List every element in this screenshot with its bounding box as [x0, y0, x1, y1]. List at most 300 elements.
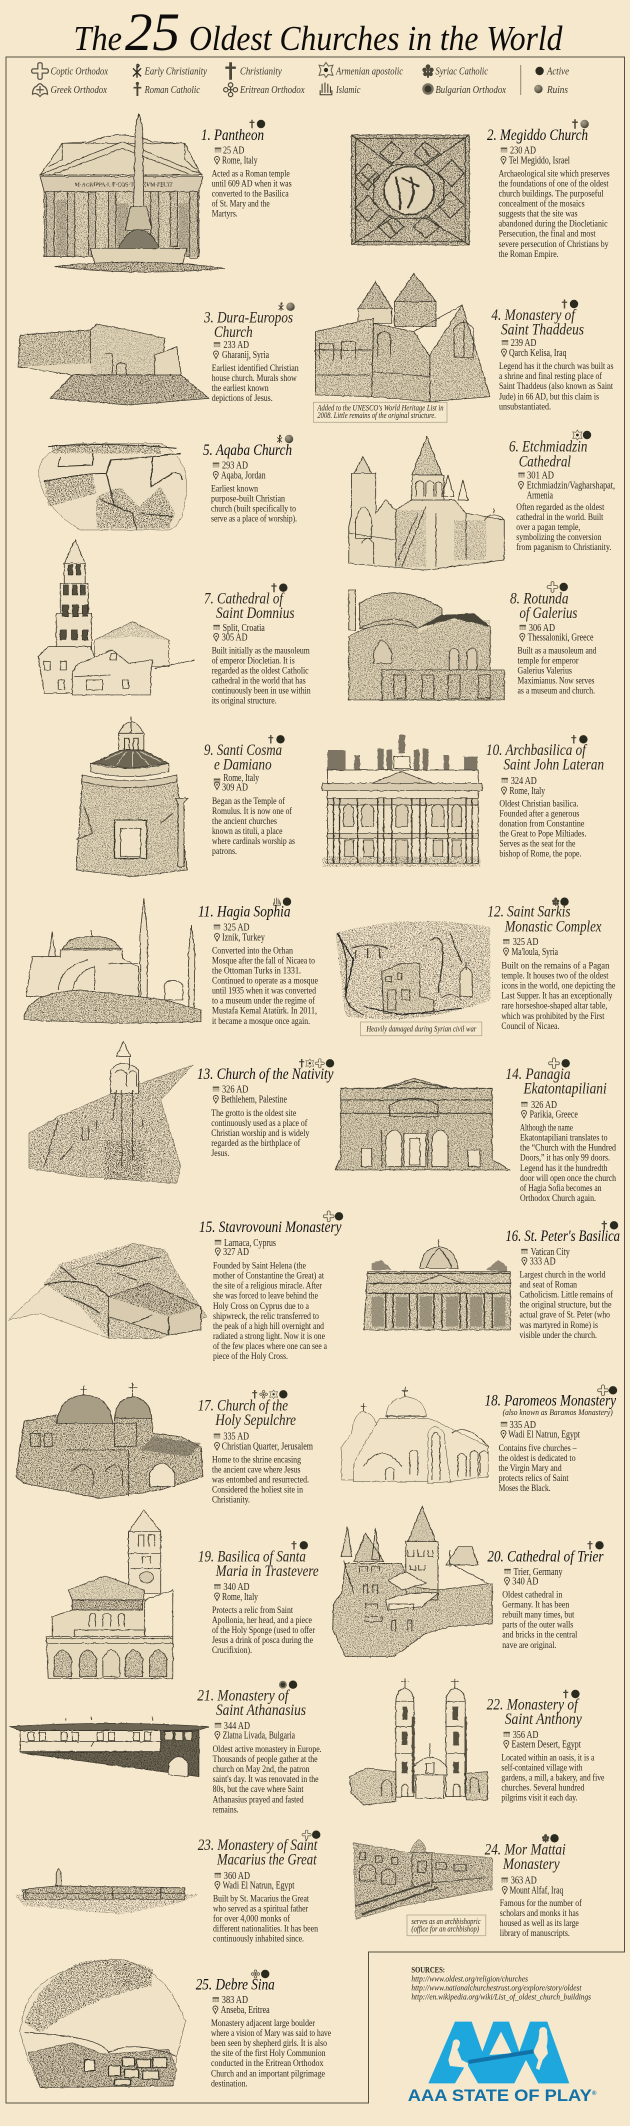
heading: Church [214, 324, 253, 341]
title [74, 2, 563, 62]
status icons [279, 302, 295, 311]
description: regarded as the oldest Catholic [212, 666, 309, 676]
date and location: Christian Quarter, Jerusalem [222, 1442, 313, 1452]
description: abandoned during the Diocletianic [499, 219, 608, 230]
illustration: Mor Mattai Monastery [354, 1839, 492, 1919]
heading: Monastic Complex [504, 918, 602, 935]
description: Built on the remains of a Pagan [501, 960, 610, 972]
heading: 4. Monastery of [491, 307, 577, 324]
date and location [215, 1871, 295, 1892]
date and location: Eastern Desert, Egypt [512, 1740, 581, 1750]
illustration: Aqaba ruins [38, 443, 187, 530]
description: Jude) in 66 AD, but this claim is [499, 391, 599, 402]
location and date: 340 AD [512, 1576, 538, 1588]
description: Contains five churches – [499, 1443, 577, 1454]
title: 25 [125, 2, 180, 62]
description: Germany. It has been [502, 1600, 569, 1610]
description: was martyred in Rome) is [520, 1320, 598, 1331]
date and location: 335 AD [223, 1432, 249, 1442]
caption: war damage note: Heavily damaged during Syrian civil war [366, 1024, 477, 1034]
description: Monastery adjacent large boulder [211, 2018, 316, 2029]
date and location [518, 470, 615, 502]
heading: Saint Athanasius [216, 1702, 306, 1719]
description [499, 798, 586, 860]
description: she was forced to leave behind the [213, 1291, 318, 1302]
heading [485, 1841, 566, 1873]
item 22: Monastery of Saint Anthony [350, 1678, 604, 1805]
location and date [213, 623, 265, 644]
date and location [504, 1730, 581, 1750]
legend: Greek Orthodox [51, 85, 107, 96]
location and date: Larnaca, Cyprus [224, 1238, 276, 1249]
description: Often regarded as the oldest [516, 502, 605, 513]
heading: e Damiano [214, 757, 272, 774]
description: conducted in the Eritrean Orthodox [211, 2058, 324, 2069]
description: Acted as a Roman temple [212, 168, 290, 180]
description [212, 796, 295, 857]
date and location: 363 AD [511, 1876, 537, 1886]
location and date [215, 1238, 276, 1258]
description: of Hagia Sofia becomes an [520, 1183, 602, 1194]
description: Although the name [520, 1122, 573, 1134]
description: until 1935 when it was converted [212, 986, 316, 997]
date and location: 325 AD [223, 922, 250, 934]
item 19: Basilica of Santa Maria in Trastevere [46, 1510, 319, 1678]
heading [486, 742, 604, 774]
description: Founded after a generous [499, 808, 580, 820]
status icons [323, 1211, 343, 1222]
description: Legend has it the hundredth [520, 1163, 608, 1174]
date and location: 340 AD [223, 1582, 250, 1593]
logo: AAA State of Play [408, 2022, 597, 2105]
description: Earliest known [211, 484, 258, 494]
description: Jesus. [211, 1148, 229, 1159]
item 8: Rotunda of Galerius [349, 582, 597, 700]
description: church (built specifically to [211, 504, 296, 514]
date and location: 360 AD [224, 1871, 250, 1882]
heading: 21. Monastery of [197, 1687, 291, 1704]
heading: 3. Dura-Europos [203, 309, 293, 326]
description: the site of the first Holy Communion [211, 2048, 326, 2059]
description: house church. Murals show [212, 373, 297, 384]
date and location: 293 AD [222, 460, 248, 472]
location and date: Split, Croatia [223, 623, 265, 634]
description: from paganism to Christianity. [516, 542, 611, 553]
date and location [503, 937, 558, 958]
description: a shrine and final resting place of [499, 371, 603, 382]
description: of St. Mary and the [212, 199, 270, 210]
description [499, 168, 610, 260]
description: Built initially as the mausoleum [212, 646, 310, 656]
heading: Saint Anthony [505, 1711, 583, 1728]
date and location: 326 AD [531, 1100, 557, 1111]
description: rare horseshoe-shaped altar table, [501, 1001, 607, 1012]
date and location: 344 AD [224, 1721, 250, 1732]
description: the earliest known [212, 383, 269, 394]
description: serve as a place of worship). [211, 514, 297, 524]
illustration: Pantheon [39, 113, 225, 272]
date and location [213, 1084, 287, 1106]
description: to a museum under the regime of [212, 996, 316, 1007]
date and location [502, 338, 566, 359]
description [516, 502, 611, 553]
item 5: Aqaba Church [38, 435, 297, 530]
item 11: Hagia Sophia [24, 898, 318, 1027]
description: who served as a spiritual father [213, 1904, 309, 1914]
date and location: 356 AD [513, 1730, 538, 1741]
description: the peak of a high hill overnight and [213, 1321, 324, 1332]
heading [198, 1548, 319, 1580]
description: Persecution, the final and most [499, 229, 596, 240]
item 16: St. Peter's Basilica [364, 1221, 620, 1341]
status icons [547, 582, 568, 592]
legend [32, 62, 569, 97]
illustration: Paromeos Monastery [342, 1387, 488, 1483]
location and date: Vatican City [531, 1247, 570, 1258]
description: self-contained village with [501, 1762, 583, 1774]
description [213, 1894, 318, 1945]
status icons [571, 735, 588, 744]
heading: 1. Pantheon [201, 127, 264, 144]
description: visible under the church. [520, 1330, 597, 1341]
date and location [521, 1100, 578, 1120]
description: The grotto is the oldest site [211, 1108, 296, 1119]
status icons [291, 1541, 308, 1550]
description: Began as the Temple of [212, 796, 286, 807]
heading: Maria in Trastevere [215, 1563, 319, 1580]
illustration: Church of the Holy Sepulchre [16, 1383, 203, 1498]
heading: 12. Saint Sarkis [487, 904, 570, 921]
illustration: Dura-Europos ruins [18, 324, 209, 405]
legend: Christianity [240, 66, 282, 78]
description: patrons. [212, 846, 237, 857]
description: donation from Constantine [499, 818, 584, 830]
description [502, 1590, 578, 1651]
legend: Syriac Catholic [436, 66, 488, 78]
description: severe persecution of Christians by [499, 239, 609, 250]
description: Council of Nicaea. [501, 1021, 559, 1032]
description: unsubstantiated. [499, 401, 551, 412]
illustration: St. Peter's Basilica [364, 1239, 510, 1330]
description: Holy Cross on Cyprus due to a [213, 1301, 310, 1312]
description: concealment of the mosaics [499, 199, 585, 210]
heading: 10. Archbasilica of [486, 742, 588, 759]
item 21: Monastery of Saint Athanasius [10, 1680, 322, 1815]
title: The [74, 19, 122, 58]
date and location: 326 AD [222, 1084, 248, 1096]
description: library of manuscripts. [500, 1928, 570, 1939]
description: regarded as the birthplace of [211, 1138, 301, 1149]
description: 80s, but the cave where Saint [213, 1784, 304, 1795]
heading: 17. Church of the [198, 1397, 288, 1414]
status icons [587, 1541, 604, 1550]
heading: 22. Monastery of [487, 1696, 580, 1713]
legend: Coptic Orthodox [51, 66, 108, 78]
description: piece of the Holy Cross. [213, 1351, 288, 1362]
description: and seat of Roman [520, 1280, 577, 1290]
item 10: Archbasilica of Saint John Lateran [322, 735, 604, 867]
item 14: Panagia Ekatontapiliani [336, 1058, 616, 1204]
date and location: 383 AD [222, 1995, 248, 2006]
heading: Saint John Lateran [504, 757, 604, 774]
date and location: 325 AD [513, 937, 538, 948]
status icons [273, 898, 291, 906]
description: symbolizing the conversion [516, 532, 601, 543]
date and location: Zlatna Livada, Bulgaria [223, 1730, 295, 1742]
location and date: 305 AD [222, 632, 248, 644]
date and location [214, 146, 258, 166]
date and location: Rome, Italy [510, 786, 545, 797]
description [212, 363, 299, 404]
description: it became a mosque once again. [212, 1016, 310, 1027]
date and location [501, 1420, 580, 1440]
status icons [573, 430, 591, 440]
item 18: Paromeos Monastery [342, 1385, 617, 1494]
date and location [502, 776, 545, 797]
illustration: Hagia Sophia [24, 898, 201, 1023]
description: Christianity. [212, 1495, 250, 1506]
date and location [213, 1995, 270, 2016]
description: continuously used as a place of [211, 1118, 308, 1129]
heading: Macarius the Great [216, 1852, 317, 1869]
status icons [572, 119, 589, 129]
date and location: Wadi El Natrun, Egypt [508, 1430, 580, 1440]
description: different nationalities. It has been [213, 1924, 318, 1935]
item 20: Cathedral of Trier [333, 1507, 604, 1657]
description: church buildings. The purposeful [499, 188, 604, 200]
illustration: Santa Maria in Trastevere [46, 1510, 173, 1678]
date and location: Bethlehem, Palestine [221, 1094, 287, 1106]
status icons [252, 1390, 287, 1399]
sources: SOURCES: [411, 1964, 445, 1974]
item 25: Debre Sina [20, 1959, 331, 2089]
location and date: 309 AD [222, 783, 248, 794]
description: the Ottoman Turks in 1331. [212, 966, 301, 976]
date and location: Tel Megiddo, Israel [509, 156, 570, 166]
status icons [552, 898, 569, 906]
description: Converted into the Orhan [212, 946, 293, 956]
description: remains. [213, 1804, 239, 1815]
description: Located within an oasis, it is a [501, 1752, 595, 1764]
description [499, 1443, 577, 1494]
description: over a pagan temple, [516, 522, 580, 533]
title: Oldest Churches in the World [189, 19, 563, 58]
caption: UNESCO note [313, 402, 447, 422]
description: Continued to operate as a mosque [212, 976, 318, 987]
heading [506, 1066, 607, 1098]
description: was entombed and resurrected. [212, 1475, 309, 1486]
illustration: Rotunda of Galerius [349, 590, 504, 700]
description: Mosque after the fall of Nicaea to [212, 956, 315, 966]
heading: Saint Domnius [216, 605, 294, 622]
heading [198, 1397, 296, 1429]
description: Crucifixion). [212, 1645, 252, 1656]
logo: AAA State of Play: AAA STATE OF PLAY [408, 2086, 592, 2105]
heading: Monastery [502, 1856, 560, 1873]
heading: 25. Debre Sina [196, 1977, 275, 1994]
description: nave are original. [502, 1640, 556, 1651]
description: the Great to Pope Miltiades. [499, 828, 586, 840]
date and location: 230 AD [510, 146, 536, 156]
heading [510, 590, 577, 622]
date and location: Aqaba, Jordan [221, 470, 266, 482]
heading: 11. Hagia Sophia [198, 904, 290, 921]
date and location: Qarch Kelisa, Iraq [509, 348, 566, 359]
description: mother of Constantine the Great) at [213, 1271, 324, 1282]
heading [204, 742, 282, 774]
heading: 23. Monastery of Saint [198, 1837, 318, 1854]
description: Oldest Christian basilica. [499, 798, 578, 810]
description [499, 361, 614, 412]
description: the Virgin Mary and [499, 1463, 562, 1474]
description: the oldest is dedicated to [499, 1453, 576, 1464]
description: temple for emperor [518, 656, 579, 666]
heading: 13. Church of the Nativity [197, 1066, 334, 1083]
description: Founded by Saint Helena (the [213, 1260, 306, 1272]
illustration: Church of the Nativity [29, 1042, 193, 1183]
description: the ancient cave where Jesus [212, 1464, 301, 1476]
date and location: Wadi El Natrun, Egypt [223, 1880, 295, 1892]
item 24: Mor Mattai Monastery [354, 1834, 582, 1939]
date and location [214, 340, 269, 361]
description: Galerius Valerius [518, 666, 572, 676]
heading: 8. Rotunda [510, 590, 568, 607]
description: the site of a religious miracle. After [213, 1281, 323, 1292]
item 23: Monastery of Saint Macarius the Great [14, 1830, 320, 1945]
heading: Cathedral [519, 453, 571, 470]
heading: 9. Santi Cosma [204, 742, 282, 759]
description: parts of the outer walls [502, 1620, 574, 1631]
location and date: Trier, Germany [514, 1567, 562, 1578]
date and location [502, 1876, 563, 1896]
date and location: 324 AD [511, 776, 537, 787]
date and location: Ma'loula, Syria [512, 947, 558, 958]
item 3: Dura-Europos Church [18, 302, 299, 405]
description: Considered the holiest site in [212, 1485, 303, 1496]
description: church on May 2nd, the patron [213, 1764, 310, 1775]
status icons [251, 1970, 269, 1978]
date and location: Thessaloniki, Greece [528, 632, 594, 644]
legend: Roman Catholic [144, 85, 200, 96]
description: suggests that the site was [499, 209, 578, 220]
status icons [598, 1385, 617, 1396]
date and location: Armenia [527, 490, 553, 502]
date and location [213, 460, 266, 482]
sources [411, 1964, 591, 2002]
date and location: 335 AD [510, 1420, 536, 1431]
description: Earliest identified Christian [212, 363, 299, 374]
description: of the Holy Sponge (used to offer [212, 1625, 316, 1636]
description [212, 168, 292, 220]
heading [198, 1837, 318, 1869]
status icons [542, 1834, 559, 1843]
description: shipwreck, the relic transferred to [213, 1311, 319, 1322]
description: Mustafa Kemal Atatürk. In 2011, [212, 1006, 317, 1017]
description: saint's day. It was renovated in the [213, 1774, 319, 1785]
item 9: Santi Cosma e Damiano [76, 717, 295, 877]
description: Orthodox Church again. [520, 1193, 596, 1204]
description: radiated a strong light. Now it is one [213, 1331, 325, 1342]
heading [203, 309, 293, 341]
description: Built by St. Macarius the Great [213, 1894, 309, 1904]
heading: 2. Megiddo Church [487, 127, 588, 144]
description: gardens, a mill, a bakery, and five [501, 1773, 604, 1784]
illustration: Saint Domnius tower [38, 540, 195, 695]
description: Maximianus. Now serves [518, 676, 595, 686]
description: housed as well as its large [500, 1918, 579, 1929]
description: Doors,” it has only 99 doors. [520, 1153, 610, 1164]
description: Protects a relic from Saint [212, 1605, 293, 1616]
description [212, 646, 311, 707]
illustration: Monastery of Saint Athanasius [10, 1717, 209, 1777]
status icons [302, 1830, 320, 1839]
illustration: Stavrovouni Monastery [8, 1243, 207, 1338]
heading: Saint Thaddeus [501, 322, 584, 339]
description [211, 1108, 309, 1159]
heading: 15. Stavrovouni Monastery [199, 1219, 342, 1236]
sources: http://en.wikipedia.org/wiki/List_of_oldest_church_buildings [411, 1992, 591, 2002]
heading: Holy Sepulchre [215, 1412, 296, 1429]
heading [487, 904, 602, 935]
illustration: Monastery of Saint Anthony [350, 1678, 487, 1805]
date and location: Iznik, Turkey [222, 932, 265, 944]
description: the Roman Empire. [499, 249, 559, 260]
date and location: Parikia, Greece [530, 1110, 578, 1120]
illustration: Saint Sarkis monastery [336, 921, 490, 1019]
description: destination. [211, 2078, 248, 2089]
description: churches. Several hundred [501, 1783, 585, 1794]
date and location [501, 146, 570, 166]
description: where cardinals worship as [212, 836, 295, 847]
description [212, 1605, 316, 1656]
description: cathedral in the world. Built [516, 512, 604, 523]
sources: http://www.nationalchurchestrust.org/explore/story/oldest [411, 1984, 582, 1992]
description: until 609 AD when it was [212, 178, 292, 190]
status icons [268, 735, 285, 744]
description: Christian worship and is widely [211, 1128, 309, 1139]
date and location [214, 922, 265, 944]
item 1: Pantheon [39, 113, 292, 272]
illustration: Pantheon: M·AGRIPPA·L·F·COS·TERTIVM·FECIT [75, 182, 173, 188]
heading [491, 307, 584, 339]
date and location [215, 1721, 295, 1742]
description: known as tituli, a place [212, 826, 282, 837]
illustration: Etchmiadzin cathedral [349, 437, 504, 570]
caption: archbishopric note: serves as an archbishopric [411, 1917, 481, 1926]
heading: Ekatontapiliani [523, 1081, 607, 1098]
description: temple. It houses two of the oldest [501, 970, 609, 982]
sources: http://www.oldest.org/religion/churches [411, 1974, 528, 1984]
description [500, 1898, 582, 1939]
location and date [521, 1247, 570, 1268]
subheading: alternate name: (also known as Baramos Monastery) [503, 1408, 613, 1417]
date and location: 306 AD [529, 623, 555, 634]
logo: AAA State of Play: ® [592, 2090, 597, 2097]
date and location [520, 623, 594, 644]
description: Jesus a drink of posca during the [212, 1635, 313, 1646]
description: of emperor Diocletian. It is [212, 656, 295, 666]
description: bishop of Rome, the pope. [499, 848, 581, 860]
status icons [562, 300, 578, 308]
description: continuously been in use within [212, 686, 311, 697]
description [212, 946, 318, 1027]
description: which was prohibited by the First [501, 1011, 605, 1022]
description: purpose-built Christian [211, 494, 285, 504]
description: its original structure. [212, 696, 277, 707]
date and location: 25 AD [223, 146, 244, 156]
description [213, 1744, 322, 1815]
description: Apollonia, her head, and a piece [212, 1615, 312, 1626]
